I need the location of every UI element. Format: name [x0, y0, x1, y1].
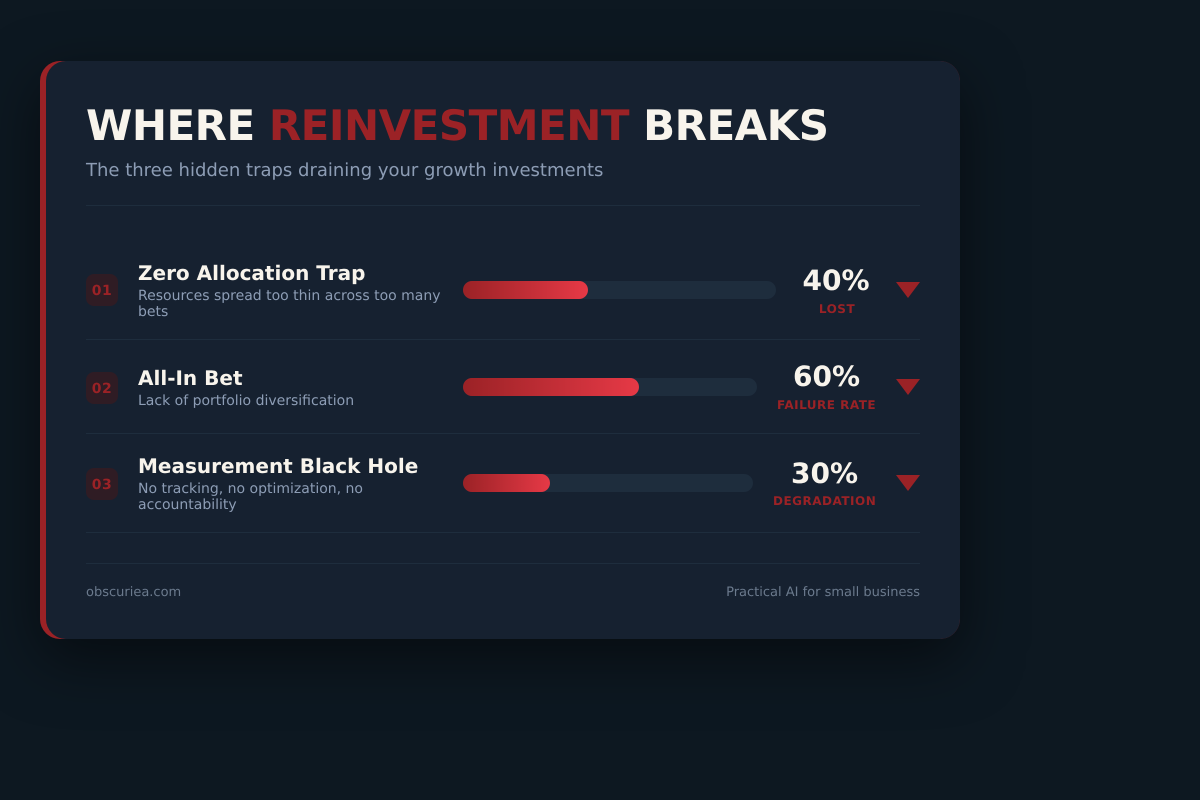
icon: down triangle 2 — [896, 379, 920, 395]
item 1 description: bets — [138, 304, 168, 320]
item 2 name: All-In Bet — [138, 366, 243, 390]
number badge 03 — [86, 468, 118, 500]
item 1 description — [138, 288, 441, 320]
icon: down triangle 1 — [896, 282, 920, 298]
item 1 description: Resources spread too thin across too many — [138, 288, 441, 304]
label failure rate: FAILURE RATE — [777, 398, 876, 412]
icon: down triangle 3 — [896, 475, 920, 491]
label lost: LOST — [819, 302, 855, 316]
item 2 description: Lack of portfolio diversification — [138, 393, 354, 409]
label degradation: DEGRADATION — [773, 494, 876, 508]
item 3 description — [138, 481, 363, 513]
bar: 40% — [463, 281, 776, 299]
panel: card — [40, 61, 960, 639]
number badge 01 — [86, 274, 118, 306]
bar: 30% — [463, 474, 753, 492]
footer left: obscuriea.com — [86, 585, 181, 600]
stat 30%: 30% — [791, 457, 858, 490]
bar: 60% — [463, 378, 757, 396]
footer right: Practical AI for small business — [726, 585, 920, 600]
item 1 name: Zero Allocation Trap — [138, 261, 365, 285]
number badge 01: 01 — [92, 283, 112, 299]
number badge 03: 03 — [92, 477, 112, 493]
number badge 02 — [86, 372, 118, 404]
subtitle: The three hidden traps draining your growth investments — [86, 160, 603, 181]
item 3 description: No tracking, no optimization, no — [138, 481, 363, 497]
item 3 description: accountability — [138, 497, 237, 513]
stat 60%: 60% — [793, 360, 860, 393]
title: WHERE REINVESTMENT BREAKS — [86, 101, 828, 150]
stat 40%: 40% — [802, 264, 870, 297]
item 3 name: Measurement Black Hole — [138, 454, 418, 478]
number badge 02: 02 — [92, 381, 112, 397]
